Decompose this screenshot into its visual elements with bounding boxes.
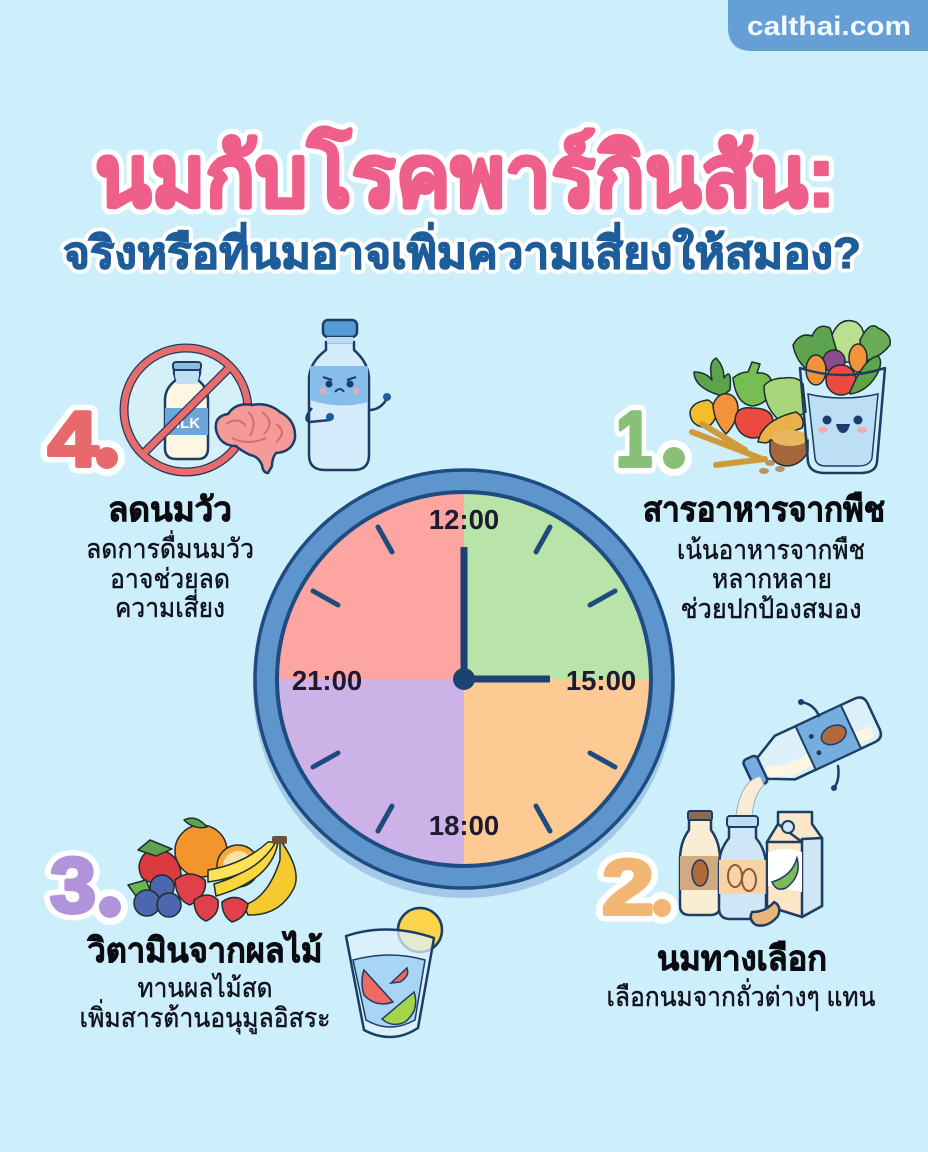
clock face quarters <box>277 492 651 866</box>
description: เน้นอาหารจากพืช <box>677 535 865 565</box>
clock <box>253 470 675 898</box>
number 1: 1 <box>616 395 652 483</box>
heading: สารอาหารจากพืช <box>643 491 885 529</box>
icon: crossed milk bottle: ILK <box>176 415 200 432</box>
icon: crossed milk bottle <box>124 348 248 472</box>
icon: milk stream <box>736 776 764 816</box>
icon: fruit-infused water <box>346 908 442 1037</box>
number 4 <box>48 395 125 483</box>
icon: brain <box>216 404 295 473</box>
number 1: 1 <box>616 395 652 483</box>
clock hour labels <box>292 504 636 841</box>
item 3: fruit vitamins <box>50 818 442 1037</box>
clock hour labels: 21:00 <box>292 665 362 696</box>
description: เลือกนมจากถั่วต่างๆ แทน <box>606 978 876 1012</box>
heading: ลดนมวัว <box>108 491 232 529</box>
description <box>86 530 254 623</box>
number 3 <box>50 841 128 929</box>
icon: pouring bottle <box>738 695 884 796</box>
description: ลดการดื่มนมวัว <box>86 530 254 564</box>
number 2 <box>602 843 678 931</box>
icon: vegetables <box>690 358 808 474</box>
description: ช่วยปกป้องสมอง <box>680 594 862 624</box>
number 4: 4 <box>48 395 98 483</box>
clock hour labels: 18:00 <box>429 810 499 841</box>
heading: นมทางเลือก <box>657 940 827 978</box>
clock hands <box>453 547 550 690</box>
number 2: 2 <box>602 843 654 931</box>
description: เพิ่มสารต้านอนุมูลอิสระ <box>80 999 330 1035</box>
number 2: 2 <box>602 843 654 931</box>
number 3: 3 <box>50 841 96 929</box>
description: อาจช่วยลด <box>110 564 230 594</box>
clock hour labels: 15:00 <box>566 665 636 696</box>
icon: milk bottles and carton <box>680 811 822 926</box>
number 3: 3 <box>50 841 96 929</box>
item 4: reduce cow milk <box>48 320 391 623</box>
clock shadow <box>253 476 675 898</box>
description: ทานผลไม้สด <box>138 973 272 1003</box>
icon: glass with face <box>793 321 890 473</box>
title: นมกับโรคพาร์กินสัน: <box>95 126 835 225</box>
clock rim <box>255 470 673 888</box>
heading: วิตามินจากผลไม้ <box>87 930 323 970</box>
description: ความเสี่ยง <box>115 589 225 623</box>
subtitle: จริงหรือที่นมอาจเพิ่มความเสี่ยงให้สมอง? <box>63 222 861 278</box>
subtitle: จริงหรือที่นมอาจเพิ่มความเสี่ยงให้สมอง? <box>63 222 861 278</box>
icon: fruit pile <box>128 818 296 922</box>
clock tick marks <box>313 527 615 831</box>
clock hour labels: 12:00 <box>429 504 499 535</box>
number 1 <box>616 395 692 483</box>
logo badge: calthai.com <box>747 11 911 41</box>
logo badge <box>728 0 928 51</box>
item 2: alternative milk <box>602 695 884 1012</box>
item 1: plant nutrients <box>616 321 890 624</box>
icon: water bottle character <box>306 320 391 470</box>
description <box>80 973 330 1035</box>
description <box>677 535 865 624</box>
description: หลากหลาย <box>712 564 832 594</box>
title: นมกับโรคพาร์กินสัน: <box>95 126 835 225</box>
number 4: 4 <box>48 395 98 483</box>
